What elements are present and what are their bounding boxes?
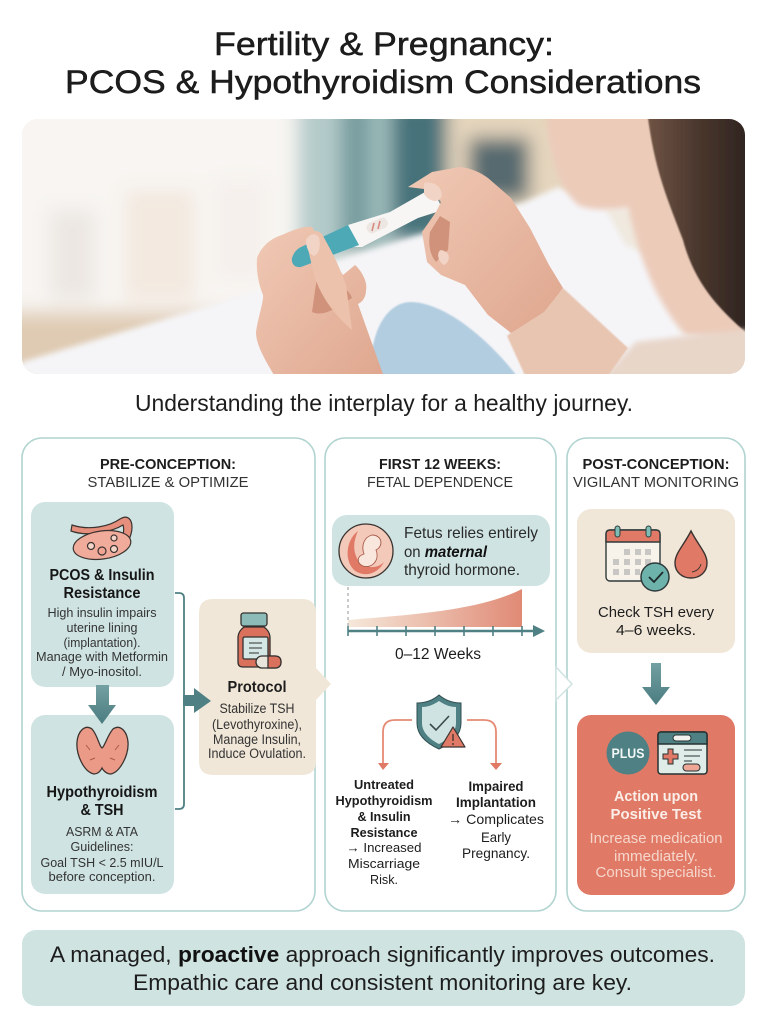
icon: thyroid gland	[77, 727, 128, 774]
panel: first 12 weeks	[325, 438, 556, 911]
text: untreated hypothyroidism risk: Resistance	[350, 825, 418, 840]
card: PCOS and insulin resistance: (implantation).	[64, 636, 140, 650]
right hand	[408, 167, 563, 333]
subtitle: Understanding the interplay for a healthy journey.	[135, 390, 633, 416]
icon: shield with warning	[417, 695, 465, 749]
card: PCOS and insulin resistance: PCOS & Insulin	[50, 567, 154, 584]
card: protocol: Stabilize TSH	[220, 701, 294, 716]
text: impaired implantation: Pregnancy.	[462, 845, 530, 861]
panel heading: first 12 weeks: FIRST 12 WEEKS:	[379, 456, 501, 473]
text: untreated hypothyroidism risk: Hypothyroidism	[336, 793, 432, 808]
chart: maternal thyroid demand over 0–12 weeks	[348, 587, 545, 663]
callout: fetal dependence: Fetus relies entirely	[404, 525, 538, 542]
icon: embryo	[339, 524, 393, 578]
text: untreated hypothyroidism risk: → Increased	[346, 840, 422, 855]
panel heading: pre-conception: PRE-CONCEPTION:	[100, 456, 236, 473]
left thumb	[306, 231, 352, 330]
left hand palm and fingers	[256, 227, 385, 380]
card: hypothyroidism and TSH: & TSH	[80, 802, 124, 819]
card: protocol: Induce Ovulation.	[208, 746, 306, 761]
icon: calendar with check	[606, 526, 669, 591]
text: impaired implantation: → Complicates	[448, 811, 544, 827]
card: hypothyroidism and TSH: Goal TSH < 2.5 mIU/L	[40, 856, 164, 870]
card: PCOS and insulin resistance: High insulin impairs	[48, 606, 156, 620]
icon: blood drop	[675, 531, 707, 578]
card: protocol: Protocol	[228, 679, 286, 696]
icon: medical chart	[658, 732, 707, 774]
card: action upon positive test: immediately.	[614, 849, 698, 865]
panel: pre-conception	[22, 438, 315, 911]
panel heading: first 12 weeks	[367, 456, 513, 491]
title	[65, 26, 701, 100]
card: PCOS and insulin resistance: / Myo-inositol.	[62, 665, 142, 679]
sweater	[609, 326, 745, 374]
photo: woman holding a pregnancy test	[22, 119, 745, 374]
card: check TSH: Check TSH every	[598, 604, 714, 621]
card: action upon positive test: Increase medication	[590, 831, 722, 847]
bracket connector	[175, 593, 184, 809]
arrow: down to action card	[642, 663, 670, 705]
card: check TSH	[577, 509, 735, 653]
card: action upon positive test: Consult specialist.	[596, 865, 716, 881]
callout: fetal dependence	[332, 515, 550, 586]
panel heading: first 12 weeks: FETAL DEPENDENCE	[367, 474, 513, 491]
badge: PLUS	[606, 732, 650, 774]
card: action upon positive test: Action upon	[614, 788, 698, 805]
title: Fertility & Pregnancy:	[214, 26, 554, 62]
text: untreated hypothyroidism risk: Risk.	[370, 872, 398, 887]
face and neck	[546, 110, 745, 340]
text: untreated hypothyroidism risk: & Insulin	[358, 809, 411, 824]
text: impaired implantation: Early	[481, 829, 511, 845]
card: hypothyroidism and TSH: Guidelines:	[70, 840, 134, 854]
text: untreated hypothyroidism risk: Untreated	[354, 777, 414, 792]
card: action upon positive test	[577, 715, 735, 895]
footer banner: A managed, proactive approach significantly improves outcomes.	[50, 942, 715, 967]
title: PCOS & Hypothyroidism Considerations	[65, 64, 701, 100]
card: check TSH: 4–6 weeks.	[616, 622, 696, 639]
panel heading: pre-conception: STABILIZE & OPTIMIZE	[88, 474, 248, 491]
text: untreated hypothyroidism risk	[336, 777, 432, 887]
arrow: to impaired implantation	[467, 720, 502, 770]
jeans knee	[372, 301, 516, 374]
panel heading: pre-conception	[88, 456, 248, 491]
card: PCOS and insulin resistance	[31, 502, 174, 687]
badge: PLUS: PLUS	[612, 746, 644, 761]
arrow: into protocol	[183, 688, 211, 713]
card: protocol: Manage Insulin,	[213, 732, 301, 747]
chevron: panel 2 to panel 3	[556, 667, 572, 700]
card: action upon positive test: Positive Test	[610, 806, 702, 823]
text: impaired implantation: Implantation	[456, 795, 536, 810]
footer banner: Empathic care and consistent monitoring are key.	[133, 970, 632, 995]
arrow: PCOS to hypothyroidism	[88, 685, 116, 724]
card: hypothyroidism and TSH: ASRM & ATA	[66, 825, 139, 839]
card: PCOS and insulin resistance: Manage with Metformin	[36, 650, 168, 664]
arrow: to untreated hypothyroidism	[378, 720, 412, 770]
footer banner	[22, 930, 745, 1006]
card: hypothyroidism and TSH: before conception.	[48, 870, 156, 884]
card: PCOS and insulin resistance: Resistance	[64, 585, 141, 602]
icon: medicine bottle and pill	[238, 613, 281, 668]
panel: post-conception	[567, 438, 745, 911]
panel heading: post-conception	[573, 456, 739, 491]
callout: fetal dependence: thyroid hormone.	[404, 562, 520, 579]
card: protocol: (Levothyroxine),	[212, 717, 302, 732]
callout: fetal dependence: on maternal	[404, 544, 488, 561]
pregnancy test stick	[292, 188, 443, 267]
panel heading: post-conception: POST-CONCEPTION:	[582, 456, 730, 473]
card: hypothyroidism and TSH	[31, 715, 174, 894]
card: protocol	[199, 599, 331, 775]
text: untreated hypothyroidism risk: Miscarriage	[348, 856, 420, 871]
icon: ovary and fallopian tube	[71, 517, 133, 563]
text: impaired implantation	[448, 779, 544, 861]
chart: maternal thyroid demand over 0–12 weeks: 0–12 Weeks	[395, 646, 481, 663]
text: impaired implantation: Impaired	[468, 779, 524, 794]
card: hypothyroidism and TSH: Hypothyroidism	[46, 784, 158, 801]
panel heading: post-conception: VIGILANT MONITORING	[573, 474, 739, 491]
card: PCOS and insulin resistance: uterine lining	[66, 621, 138, 635]
